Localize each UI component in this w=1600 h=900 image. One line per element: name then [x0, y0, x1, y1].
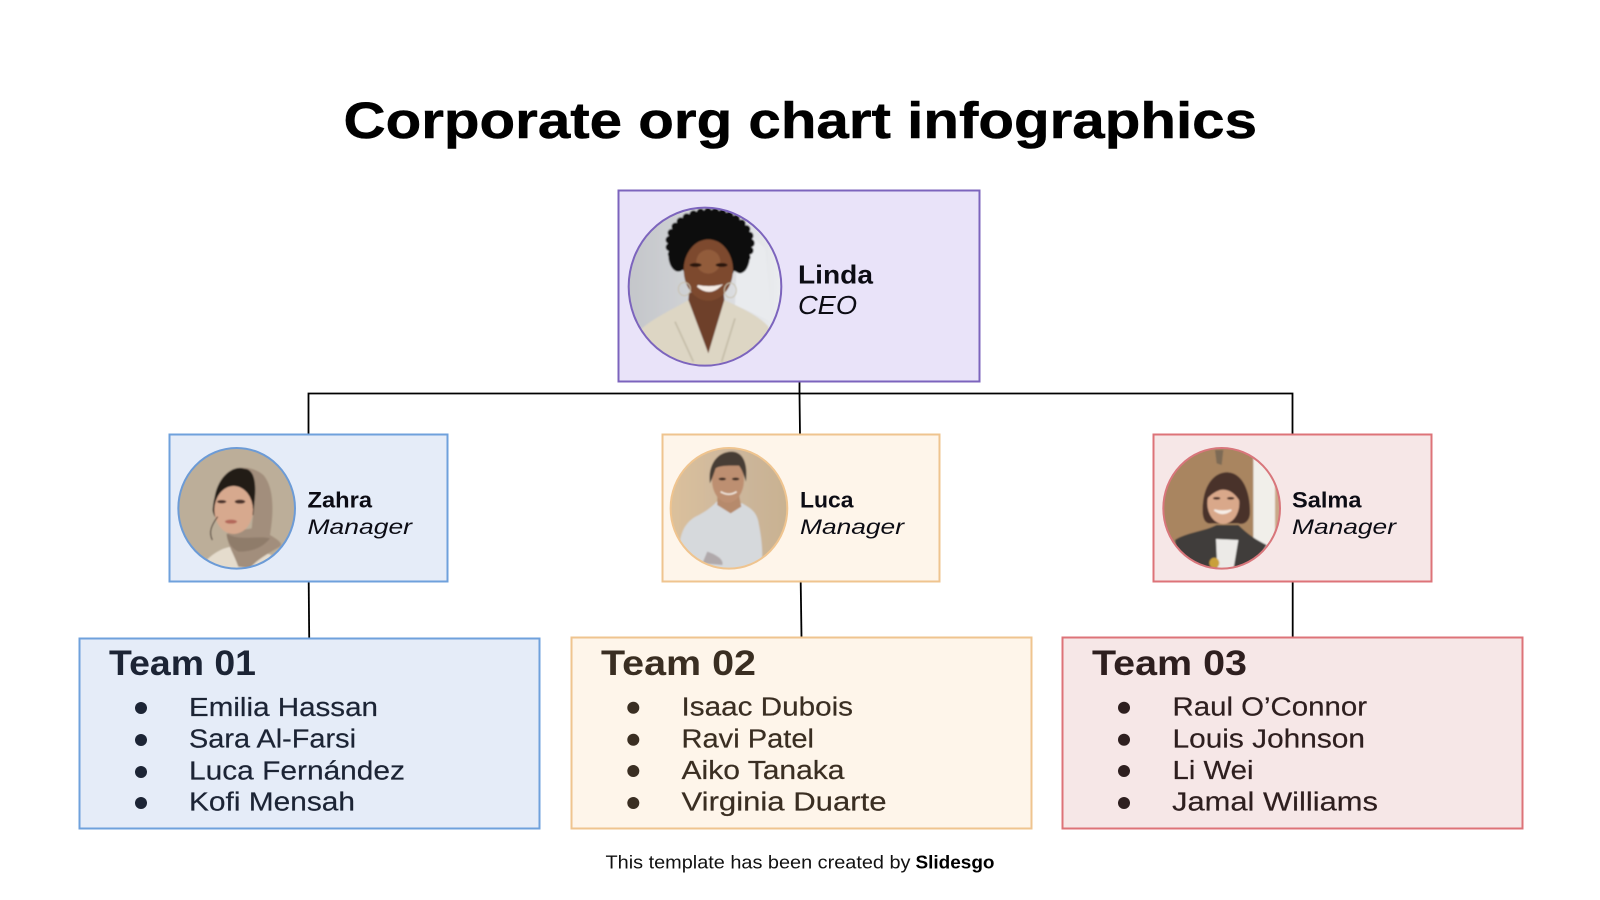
panel: Team 02	[572, 638, 1032, 828]
panel: manager Salma	[1154, 434, 1432, 582]
member: Kofi Mensah: Kofi Mensah	[189, 789, 355, 817]
role: Manager: Manager	[1292, 516, 1397, 539]
heading: Team 02: Team 02	[601, 644, 756, 683]
name: Salma: Salma	[1292, 488, 1362, 512]
panel: Team 03	[1062, 638, 1522, 828]
member: Louis Johnson: Louis Johnson	[1172, 725, 1365, 753]
member: Aiko Tanaka	[627, 757, 845, 785]
footer credit: This template has been created by	[606, 852, 910, 872]
heading: Team 01: Team 01	[109, 644, 256, 683]
member: Sara Al-Farsi: Sara Al-Farsi	[189, 726, 356, 754]
member: Li Wei: Li Wei	[1172, 757, 1254, 785]
member: Sara Al-Farsi	[135, 726, 356, 754]
connectors: managers to teams	[309, 582, 1293, 638]
panel: Team 01	[80, 638, 540, 828]
member: Isaac Dubois: Isaac Dubois	[682, 694, 853, 722]
role: Manager: Manager	[800, 516, 905, 539]
portrait: Linda	[625, 205, 785, 368]
name: Zahra: Zahra	[308, 488, 373, 512]
member: Ravi Patel: Ravi Patel	[682, 725, 814, 753]
member: Emilia Hassan	[135, 694, 378, 722]
member: Jamal Williams: Jamal Williams	[1172, 789, 1378, 817]
member: Raul O’Connor: Raul O’Connor	[1172, 694, 1368, 722]
connectors: CEO to managers	[308, 382, 1292, 434]
member: Isaac Dubois	[627, 694, 853, 722]
title: Corporate org chart infographics	[344, 92, 1257, 149]
panel: CEO Linda	[618, 190, 980, 382]
member: Luca Fernández	[135, 757, 405, 785]
member: Li Wei	[1118, 757, 1254, 785]
role: Manager: Manager	[308, 516, 413, 539]
member: Ravi Patel	[627, 725, 814, 753]
member: Emilia Hassan: Emilia Hassan	[189, 694, 378, 722]
member: Virginia Duarte: Virginia Duarte	[682, 789, 886, 817]
member: Virginia Duarte	[627, 789, 886, 817]
name: Luca: Luca	[800, 488, 854, 512]
member: Jamal Williams	[1118, 789, 1378, 817]
member: Louis Johnson	[1118, 725, 1365, 753]
panel: manager Luca	[662, 434, 940, 582]
member: Aiko Tanaka: Aiko Tanaka	[682, 757, 845, 785]
role: CEO: CEO	[798, 290, 857, 320]
portrait: Zahra	[175, 445, 300, 570]
panel: manager Zahra	[170, 434, 448, 582]
heading: Team 03: Team 03	[1092, 644, 1247, 683]
member: Kofi Mensah	[135, 789, 355, 817]
portrait: Luca	[667, 445, 792, 570]
member: Luca Fernández: Luca Fernández	[189, 757, 405, 785]
portrait: Salma	[1160, 445, 1285, 570]
member: Raul O’Connor	[1118, 694, 1368, 722]
name: Linda: Linda	[798, 260, 874, 290]
footer credit: Slidesgo	[916, 852, 995, 872]
